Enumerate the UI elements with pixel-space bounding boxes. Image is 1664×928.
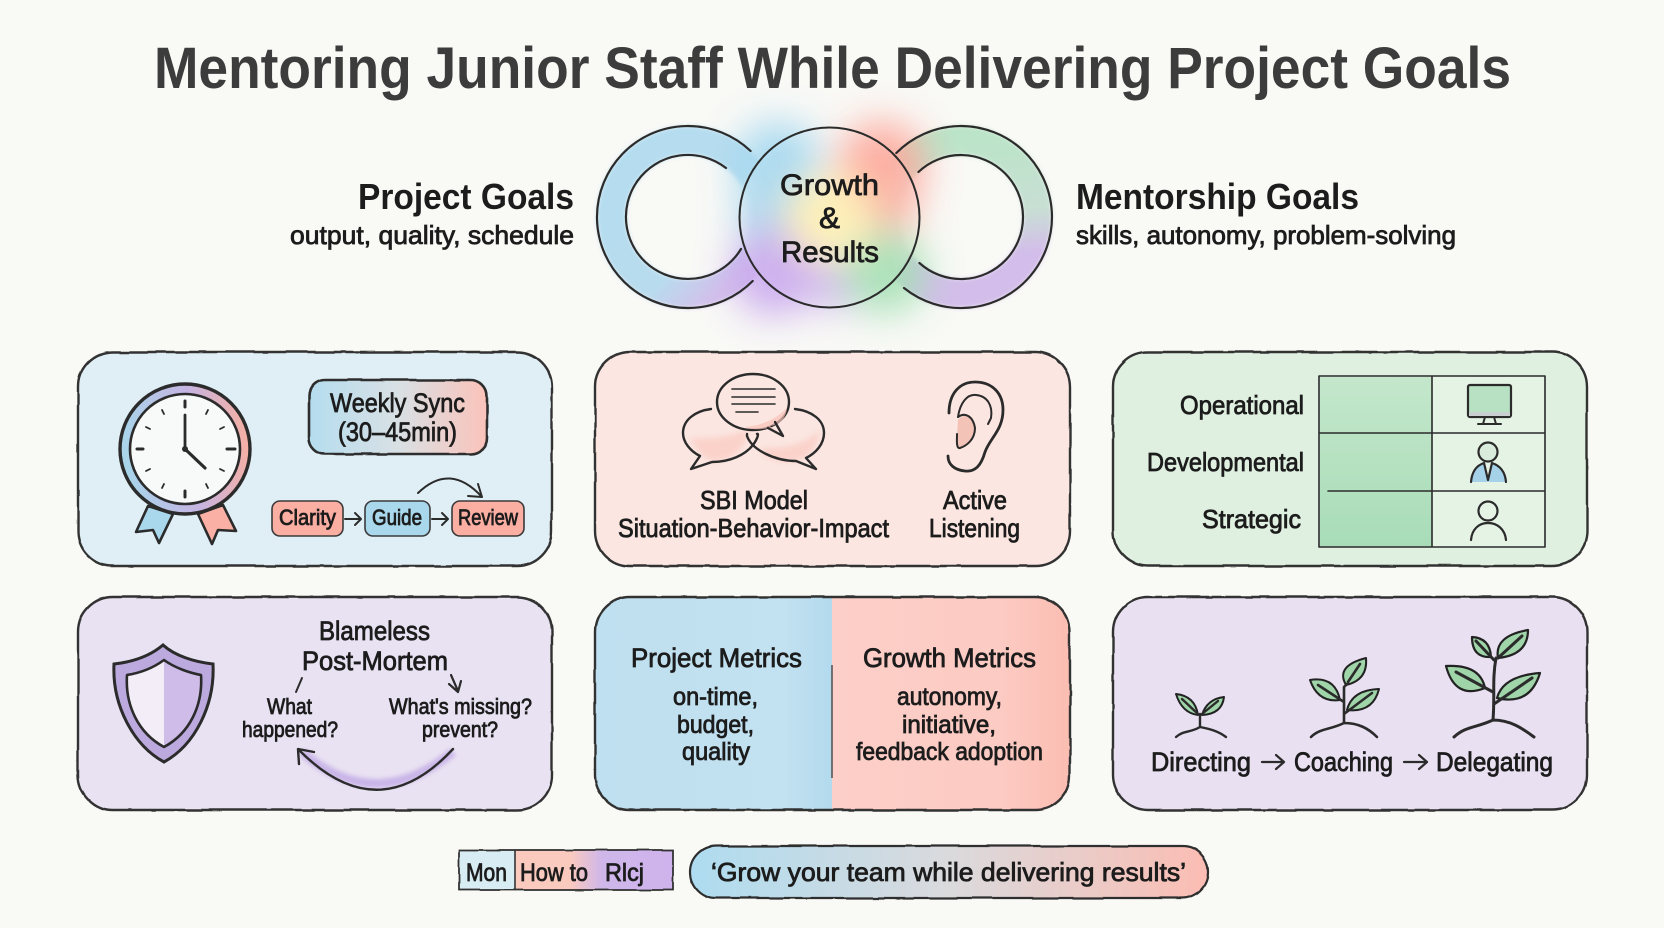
project metrics: quality: [682, 738, 750, 766]
heading: project goals: [290, 176, 574, 250]
cycle labels: prevent?: [422, 717, 498, 742]
text: SBI model: [618, 485, 890, 543]
growth metrics: autonomy,: [897, 683, 1002, 711]
text: active listening: Listening: [929, 513, 1020, 543]
text: active listening: [929, 485, 1020, 543]
flow: clarity guide review: Review: [458, 505, 518, 530]
heading: mentorship goals: skills, autonomy, problem-solving: [1076, 220, 1456, 250]
quote pill: [690, 846, 1208, 898]
heading: mentorship goals: [1076, 176, 1456, 250]
heading: project goals: output, quality, schedule: [290, 220, 574, 250]
heading: blameless post-mortem: Blameless: [319, 616, 430, 646]
callout: weekly sync: Weekly Sync: [330, 388, 465, 418]
panel: task matrix: [1113, 352, 1587, 566]
callout: weekly sync: [309, 380, 487, 454]
calendar strip: [459, 850, 673, 890]
cycle labels: happened?: [242, 717, 338, 742]
project metrics: Project Metrics: [631, 643, 802, 673]
cycle labels: [242, 694, 532, 742]
cycle arrows: [296, 675, 461, 790]
center label: Growth: [780, 169, 879, 202]
panel: blameless post-mortem: [78, 597, 552, 810]
calendar strip: Rlcj: [605, 859, 644, 887]
growth metrics: [856, 643, 1043, 766]
quote pill: ‘Grow your team while delivering results’: [711, 857, 1186, 887]
text: SBI model: Situation-Behavior-Impact: [618, 513, 890, 543]
labels: Developmental: [1147, 447, 1304, 477]
cycle labels: What: [267, 694, 312, 719]
center label: [780, 169, 879, 269]
project metrics: [631, 643, 802, 766]
growth metrics: initiative,: [902, 711, 996, 739]
panel: feedback: [595, 352, 1070, 566]
panel: metrics: [595, 597, 1070, 810]
heading: blameless post-mortem: Post-Mortem: [302, 646, 448, 676]
flow: clarity guide review: Guide: [372, 505, 422, 530]
center label: Results: [781, 236, 879, 269]
venn diagram: growth and results: [597, 121, 1052, 316]
icon: clock with ribbons: [120, 384, 250, 544]
calendar strip: Mon: [466, 859, 507, 887]
growth metrics: Growth Metrics: [863, 643, 1036, 673]
labels: Strategic: [1202, 504, 1301, 534]
text: active listening: Active: [943, 485, 1007, 515]
panel: leadership stages: [1113, 597, 1587, 810]
calendar strip: How to: [520, 859, 588, 887]
cycle labels: What's missing?: [389, 694, 532, 719]
icon: seedling: [1176, 694, 1226, 737]
icon: shield: [114, 645, 213, 762]
stage labels: Directing: [1151, 747, 1251, 777]
icon: speech bubbles: [683, 374, 824, 469]
project metrics: budget,: [677, 711, 754, 739]
icon: monitor: [1468, 385, 1511, 424]
heading: blameless post-mortem: [302, 616, 448, 676]
heading: mentorship goals: Mentorship Goals: [1076, 176, 1359, 217]
project metrics: on-time,: [673, 683, 758, 711]
stage labels: Coaching: [1294, 747, 1393, 777]
flow: clarity guide review: Clarity: [279, 505, 336, 530]
stage labels: [1151, 747, 1553, 777]
table: [1319, 376, 1545, 547]
heading: project goals: Project Goals: [358, 176, 574, 217]
center label: &: [819, 202, 840, 235]
flow: clarity guide review: [272, 478, 524, 536]
callout: weekly sync: (30–45min): [338, 417, 457, 447]
stage labels: Delegating: [1436, 747, 1553, 777]
panel: weekly sync: [78, 352, 552, 566]
icon: young plant: [1310, 658, 1379, 737]
icon: grown plant: [1446, 630, 1540, 737]
labels: [1147, 390, 1304, 534]
growth metrics: feedback adoption: [856, 738, 1043, 766]
icon: person: [1471, 502, 1506, 540]
text: SBI model: SBI Model: [700, 485, 808, 515]
title: Mentoring Junior Staff While Delivering Project Goals: [154, 36, 1511, 101]
icon: ear: [948, 382, 1003, 471]
labels: Operational: [1180, 390, 1304, 420]
icon: mentor person: [1471, 442, 1506, 482]
